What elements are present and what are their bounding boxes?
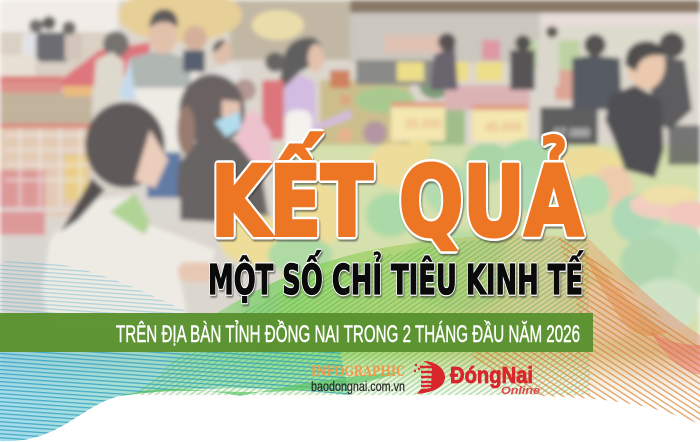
wave: teal band left: [0, 352, 350, 442]
woman with blue mask: [176, 74, 270, 225]
title: KẾT QUẢ: KẾT QUẢ: [211, 133, 583, 258]
price signs: [391, 62, 598, 148]
woman in beige jacket: [92, 31, 129, 110]
label: infographic: INFOGRAPHIC: [311, 364, 405, 380]
back shoppers left: [0, 16, 82, 77]
produce counter left of price signs: [320, 40, 595, 160]
price signs: 25.000: [405, 117, 442, 131]
fade of photo to white: [0, 352, 700, 400]
girl in white hoodie: [42, 102, 215, 330]
price signs: 27.000: [553, 126, 590, 140]
wave: red end: [650, 330, 700, 375]
subtitle: Một số chỉ tiêu kinh tế: [208, 250, 584, 304]
label: website: baodongnai.com.vn: [311, 378, 405, 394]
shoppers in purple, red and pink: [234, 37, 352, 165]
wave: orange band: [580, 250, 668, 336]
store wall and shelves: [0, 0, 700, 92]
shoppers behind center: [183, 26, 240, 80]
shopping cart: [0, 124, 92, 240]
decorative wave lines: [0, 236, 700, 442]
green banner: [0, 313, 593, 352]
man in grey and white shirt: [118, 9, 199, 200]
red display and baskets: [0, 42, 150, 126]
melons and fruit display: [220, 139, 700, 400]
wave: orange hatch right: [470, 236, 700, 424]
wave: green ridge under banner: [120, 372, 400, 396]
logo wordmark: Online: Online: [501, 385, 540, 397]
price signs: 45.000: [485, 120, 522, 134]
wave: faint teal lines above banner: [0, 262, 186, 313]
wave tint over photo: [160, 235, 700, 424]
floor: [0, 235, 120, 325]
logo icon: [414, 361, 445, 394]
title: KẾT QUẢ: KẾT QUẢ: [211, 133, 583, 258]
wave: green hatch center: [135, 237, 590, 395]
logo wordmark: Đồng Nai: ĐóngNai: [450, 362, 533, 388]
shoppers right: [430, 26, 700, 178]
